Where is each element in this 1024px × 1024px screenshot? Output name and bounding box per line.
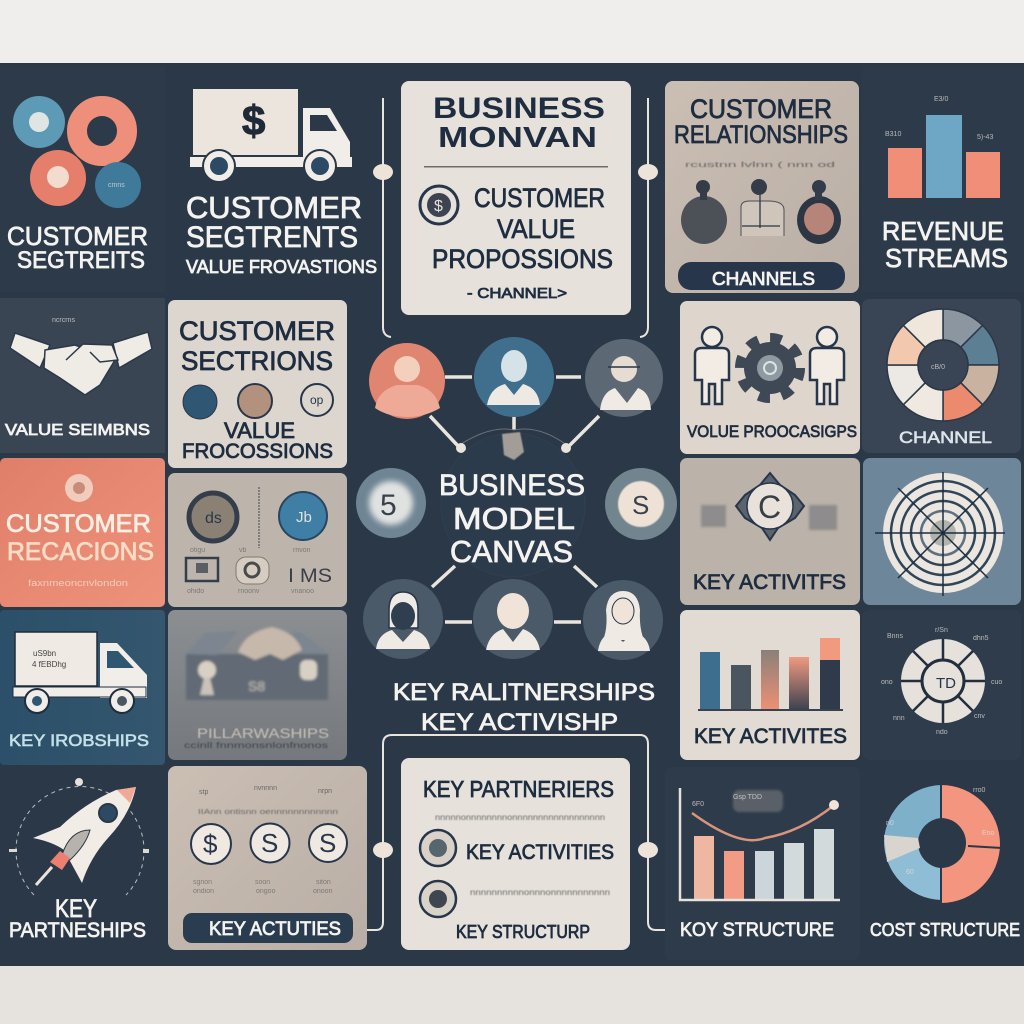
icon: umbrella scene <box>186 627 328 700</box>
panel: gear key activities <box>680 458 860 605</box>
chart: donut: 60 <box>906 869 914 876</box>
icon: coin left: 5 <box>380 489 397 522</box>
chart: donut: n0 <box>886 820 894 827</box>
heading: key partneriers: KEY PARTNERIERS <box>423 776 614 802</box>
text: wheel labels <box>881 627 1002 736</box>
text: customer value propositions: VALUE <box>497 214 575 244</box>
text: faint captions <box>198 785 338 816</box>
icons: three coins: op <box>310 393 324 407</box>
heading: key partnerships key activiship: KEY ACTIVISHP <box>421 709 618 736</box>
heading: customer segrents: VALUE FROVASTIONS <box>186 257 377 277</box>
heading: customer segrents: SEGTRENTS <box>186 221 358 254</box>
text: tiny labels: ongoo <box>256 888 276 895</box>
text: customer value propositions: PROPOSSIONS <box>432 244 613 274</box>
text: dollar signs <box>203 828 336 859</box>
text: tiny labels: vnanoo <box>291 588 314 595</box>
text: value frocossions <box>182 418 333 463</box>
avatar: blue person <box>474 337 554 417</box>
icon: delivery truck with dollar <box>190 89 352 182</box>
text: customer value propositions: CUSTOMER <box>474 183 605 213</box>
icon: dark coin <box>189 493 237 541</box>
text: wheel labels: dhn5 <box>973 635 989 642</box>
icon: monitor <box>186 558 218 581</box>
panel: volue proocasigps <box>680 301 860 454</box>
bar chart: revenue <box>885 96 1000 198</box>
avatar: woman left <box>363 579 443 659</box>
heading: customer recacions: CUSTOMER <box>6 510 151 538</box>
central network diagram <box>356 337 677 736</box>
icon: emblem <box>65 474 93 502</box>
text: faint captions: IIAnn ontisnn oennnnnnnnnnnn <box>198 809 338 816</box>
connector lines <box>430 377 599 622</box>
chart: segmented wheel <box>901 639 985 723</box>
avatar: gray person <box>585 339 663 417</box>
text: wheel labels: Bnns <box>887 633 903 640</box>
text: dollar signs: S <box>261 828 278 858</box>
icon: gear badge <box>736 473 804 540</box>
icon: dollar coin: $ <box>434 198 443 215</box>
panel: customer segments icons <box>0 66 165 292</box>
text: wheel labels: ndo <box>936 729 948 736</box>
panel: key activites bar chart <box>680 610 860 760</box>
heading: customer relationships: RELATIONSHIPS <box>674 121 848 149</box>
panel: cost structure donut <box>870 785 1020 940</box>
text: tiny labels: ondion <box>193 888 214 895</box>
icon: umbrella scene: S8 <box>248 678 265 694</box>
icon: blue circle <box>13 96 65 148</box>
text: dollar signs: $ <box>203 829 218 859</box>
text: faint caption: rcustnn lvlnn ( nnn od <box>685 162 835 169</box>
chart: bars and curve: Gsp TDD <box>733 794 762 801</box>
text: faint captions: nvnnnn <box>254 785 277 792</box>
chart: segmented wheel: TD <box>936 675 956 692</box>
text: faint caption: faxnmeoncnvlondon <box>28 578 128 588</box>
text: tiny labels: rnvon <box>293 547 311 554</box>
panel: customer relationships <box>665 81 859 293</box>
heading: customer segrents <box>186 190 377 277</box>
text: tiny labels: siton <box>316 879 331 886</box>
label: volue proocasigps: VOLUE PROOCASIGPS <box>687 422 857 441</box>
icon: dark coin: ds <box>205 510 222 527</box>
label: value seimbns: VALUE SEIMBNS <box>5 422 150 439</box>
heading: key partnerships key activiship: KEY RALITNERSHIPS <box>393 679 655 706</box>
panel: handshake value segments <box>0 298 165 453</box>
text: faint captions: stp <box>199 789 208 796</box>
heading: key partnerships <box>9 895 146 942</box>
text: faint caption: ncrcrns <box>52 317 75 324</box>
panel: key structure chart <box>665 767 860 960</box>
icon: salmon ring <box>77 106 127 156</box>
text: tiny labels: vb <box>239 547 246 554</box>
panel: truck and customer segments <box>186 89 377 277</box>
text: tiny labels: otigu <box>190 547 205 554</box>
text: wheel centre: cB/0 <box>931 364 945 371</box>
heading: customer recacions: RECACIONS <box>7 538 154 566</box>
text: faint captions: nrpn <box>318 788 332 795</box>
heading: key partnerships: PARTNESHIPS <box>9 919 146 942</box>
icons: dollar coins <box>191 824 347 864</box>
heading: revenue streams: REVENUE <box>882 216 1004 246</box>
text: tiny labels: ohido <box>187 588 204 595</box>
avatar: woman right <box>583 580 663 660</box>
icon: people and gear <box>695 327 844 404</box>
icon: coin right <box>605 468 677 540</box>
label: key activities: KEY ACTIVITFS <box>693 571 846 594</box>
icon: coin right: S <box>632 490 649 520</box>
text: tiny labels <box>187 547 314 595</box>
icon: delivery truck with dollar: $ <box>242 97 265 144</box>
icon: handshake <box>10 332 152 395</box>
chart: donut: rro0 <box>973 787 986 794</box>
text: wheel labels: cnv <box>974 713 985 720</box>
heading: customer segments <box>7 221 148 274</box>
icon: delivery truck: 4 fEBDhg <box>32 660 66 669</box>
panel: small wheel <box>862 610 1021 760</box>
heading: business model canvas: CANVAS <box>450 534 573 569</box>
chart: donut <box>884 785 1002 903</box>
icon: dollar coin <box>420 186 458 224</box>
chart: radar <box>875 472 1005 596</box>
heading: customer segrents: CUSTOMER <box>186 190 362 225</box>
text: i ms: I MS <box>288 566 332 587</box>
icon: coin 1 <box>420 830 456 866</box>
panel: business monvan <box>401 81 631 315</box>
text: blurred label <box>184 725 329 750</box>
heading: customer segments: SEGTREITS <box>17 247 145 274</box>
icon: spiral <box>236 557 269 584</box>
text: blurred label: PILLARWASHIPS <box>197 725 329 741</box>
text: dollar signs: S <box>319 828 336 858</box>
pill: key actuties: KEY ACTUTIES <box>209 919 341 940</box>
text: tiny labels: soon <box>255 879 270 886</box>
avatar: man center <box>473 579 553 659</box>
icon: gear badge: C <box>758 489 781 525</box>
text: blurred line: nnnnnonnnnnnnnonnnnnnnnnnnnnnnnnn <box>435 813 605 822</box>
icon: blue small circle <box>95 162 141 208</box>
icon: delivery truck <box>13 632 147 713</box>
pill: key actuties <box>183 913 353 943</box>
heading: customer sections <box>179 316 335 376</box>
bar chart <box>698 638 843 711</box>
heading: customer segments: CUSTOMER <box>7 221 148 251</box>
text: tiny labels: sgnon <box>193 879 212 886</box>
icon: side tags <box>701 505 837 530</box>
pill: channels <box>678 262 845 290</box>
avatar: salmon person <box>369 343 445 419</box>
heading: customer sections: SECTRIONS <box>181 346 333 376</box>
text: wheel labels: ono <box>881 679 893 686</box>
text: tiny labels: onoon <box>313 888 333 895</box>
heading: customer relationships <box>674 94 848 149</box>
icon: coin left <box>356 468 426 538</box>
heading: key partnerships key activiship <box>393 679 655 736</box>
heading: key structurp: KEY STRUCTURP <box>456 922 590 942</box>
chart: bars and curve: 6F0 <box>692 801 704 808</box>
icon: blue coin <box>279 492 327 540</box>
bar chart: revenue: E3/0 <box>934 96 949 103</box>
panel: key actuties <box>168 766 367 950</box>
connector: top left bracket <box>373 98 393 337</box>
text: value frocossions: FROCOSSIONS <box>182 440 333 463</box>
heading: key activities: KEY ACTIVITIES <box>466 841 614 864</box>
panel: target radar <box>863 458 1021 605</box>
icon: three figures <box>681 179 841 244</box>
heading: revenue streams <box>882 216 1008 273</box>
chart: donut: Eno <box>982 830 995 837</box>
text: customer value propositions: - CHANNEL> <box>467 285 567 302</box>
chart: bars and curve <box>680 788 840 900</box>
text: tiny labels: rnoonv <box>238 588 260 595</box>
panel: rocket key partnerships <box>9 778 149 942</box>
label: key activites: KEY ACTIVITES <box>694 725 847 748</box>
icons: three coins <box>183 384 333 419</box>
panel: channel wheel <box>862 299 1021 453</box>
panel: blurred partnerships <box>168 610 347 760</box>
heading: business model canvas: BUSINESS <box>439 469 585 502</box>
icon: blue small circle: cmns <box>108 182 125 189</box>
label: channel: CHANNEL <box>899 428 992 447</box>
text: value frocossions: VALUE <box>224 418 295 443</box>
chart: wheel <box>887 309 999 421</box>
label: koy structure: KOY STRUCTURE <box>680 920 834 941</box>
heading: business monvan <box>433 92 605 154</box>
panel: icon grid <box>168 473 347 607</box>
pill: channels: CHANNELS <box>712 269 815 289</box>
text: wheel labels: nnn <box>893 715 905 722</box>
heading: business model canvas: MODEL <box>453 501 575 536</box>
bar chart: revenue: B310 <box>885 131 901 138</box>
icon: emblem <box>502 432 524 460</box>
heading: customer relationships: CUSTOMER <box>690 94 832 124</box>
panel: revenue streams <box>862 66 1024 292</box>
bar chart: revenue: 5)-43 <box>977 134 993 141</box>
icon: rocket <box>9 778 149 895</box>
panel: customer recacions <box>0 458 165 607</box>
heading: business model canvas <box>439 469 585 569</box>
label: key irobships: KEY IROBSHIPS <box>9 731 149 750</box>
icon: coin 2 <box>420 881 456 917</box>
heading: key partnerships: KEY <box>55 895 97 923</box>
heading: revenue streams: STREAMS <box>885 243 1008 273</box>
text: customer value propositions <box>432 183 613 302</box>
heading: business monvan: BUSINESS <box>433 92 605 125</box>
text: tiny labels <box>193 879 333 895</box>
text: wheel labels: r/Sn <box>935 627 948 634</box>
icon: delivery truck: uS9bn <box>33 649 56 658</box>
heading: customer sections: CUSTOMER <box>179 316 335 346</box>
icon: blue coin: Jb <box>296 509 312 526</box>
panel: truck key relationships <box>0 610 165 765</box>
heading: business monvan: MONVAN <box>438 122 597 154</box>
text: wheel labels: cuo <box>991 679 1002 686</box>
text: blurred lines: nnnnnnnnnnonnnonnnnnnnnnnn <box>470 888 610 897</box>
panel: customer sections <box>168 300 347 468</box>
icon: salmon circle <box>30 150 86 206</box>
heading: customer recacions <box>6 510 154 566</box>
connector: bottom bracket <box>367 735 665 930</box>
connector: top right bracket <box>638 98 658 337</box>
text: blurred label: ccinll fnnmonsnlonfnonos <box>184 741 328 750</box>
panel: key partnerships stack <box>401 758 630 950</box>
